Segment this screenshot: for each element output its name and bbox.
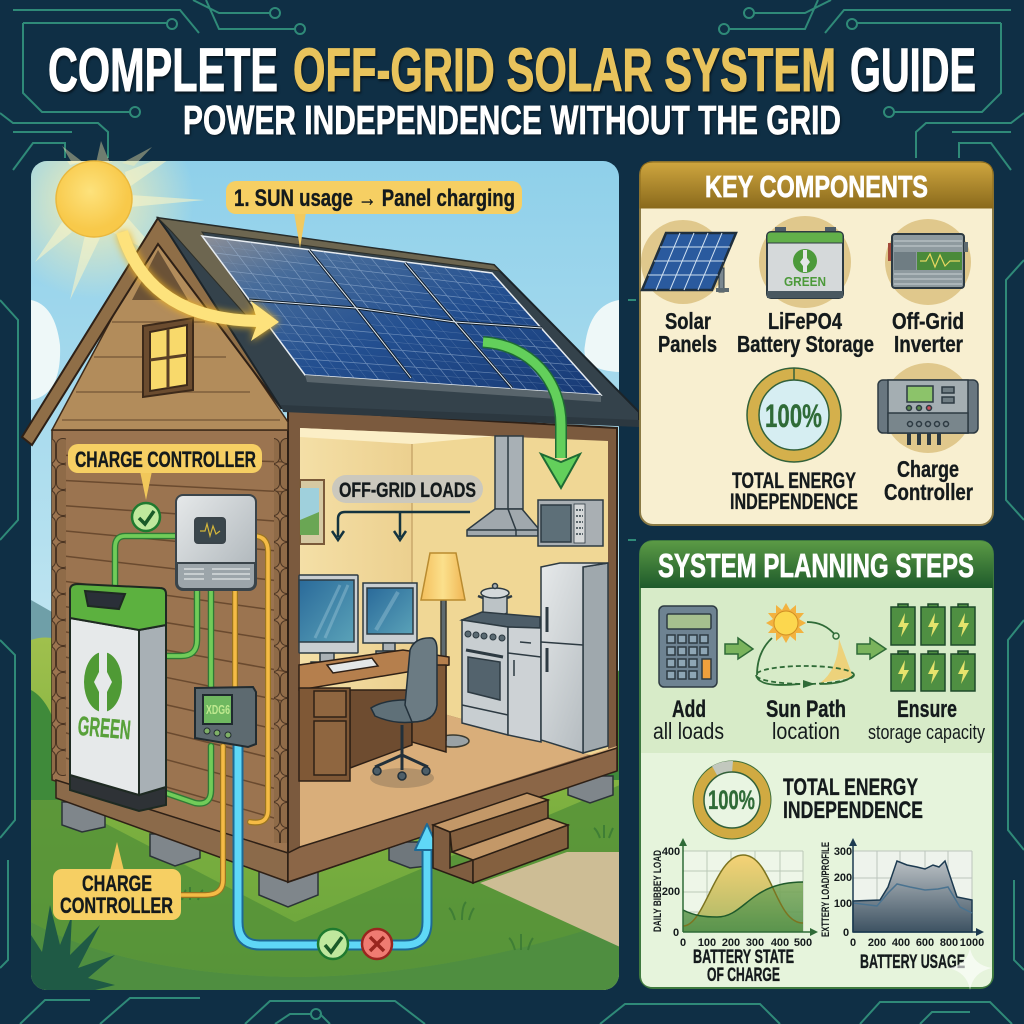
icon: sun path [756,603,854,688]
ring: 100 percent: 100% [708,785,755,815]
label: sun path location: location [772,718,840,744]
charge controller box [195,687,256,747]
label: charge controller: Controller [884,479,973,505]
arrow: panels to loads [483,342,580,488]
chart: battery usage: 200 [868,937,886,949]
label: total energy independence: TOTAL ENERGY [732,468,856,493]
green DC wires [115,536,211,803]
callout: charge controller top [68,444,262,500]
chart: battery state of charge: 100 [698,937,716,949]
sky and landscape [31,161,620,990]
chart: battery usage: 400 [892,937,910,949]
inverter box [176,495,256,590]
charge controller box: XDG6 [206,702,230,717]
chart: battery usage: 100 [834,898,852,910]
picture frame [300,480,324,544]
panel: system planning steps [640,541,993,988]
label: sun path location [766,696,846,744]
icon: battery bank [891,604,975,691]
roof [158,218,639,427]
label: add all loads: Add [672,696,706,723]
callout: charge controller bottom: CONTROLLER [60,893,173,918]
arrow step 1 to 2 [725,638,753,659]
chart: battery state of charge: 400 [662,846,680,858]
sun [31,141,204,300]
interior room [288,410,617,882]
off-grid loads label [332,475,483,540]
battery logo: GREEN [77,711,132,745]
computer monitors [299,575,417,665]
chart: battery usage: 0 [843,927,849,939]
cabinet [508,627,541,742]
heading: total energy independence [783,774,923,824]
icon: charge controller [878,363,978,453]
desk [299,650,449,781]
ring: 100 percent: 100% [765,398,822,434]
chart: battery usage: EXTTERY LOAD/PROFILE [820,842,832,937]
chart: battery state of charge: 200 [722,937,740,949]
chart: battery state of charge: 300 [746,937,764,949]
microwave [538,500,603,546]
chart: battery usage: 300 [834,846,852,858]
solar panel array [202,236,601,402]
chart: battery usage: 0 [850,937,856,949]
chart: battery state of charge: 200 [662,886,680,898]
label: solar panels: Solar [665,308,711,334]
panel: key components [640,162,993,525]
title: COMPLETE [48,36,278,104]
label: add all loads [653,696,724,744]
label: solar panels: Panels [658,331,717,357]
roof gable wall [22,218,292,445]
label: sun path location: Sun Path [766,696,846,723]
status check at inverter [132,503,160,531]
floor lamp [421,553,469,747]
label: add all loads: all loads [653,718,724,744]
refrigerator [541,563,608,753]
chart: battery state of charge: 500 [794,937,812,949]
log wall exterior [52,430,288,882]
title [48,36,976,104]
blue load wire [238,746,439,945]
chart: battery state of charge: 0 [673,927,679,939]
orange AC wires [178,536,268,895]
label: total energy independence: INDEPENDENCE [730,489,858,514]
header [640,162,993,208]
icon: off-grid inverter [885,219,971,305]
heading: total energy independence: TOTAL ENERGY [783,774,918,801]
panel: house cutaway scene [0,99,639,990]
stove with pot [462,584,540,735]
attic window [143,318,193,397]
off-grid loads label: OFF-GRID LOADS [339,479,476,502]
kitchen hood [467,436,538,536]
chart: battery state of charge: 0 [680,937,686,949]
chart: battery usage [820,838,984,973]
icon: LiFePO4 battery: GREEN [784,274,826,289]
battery logo [77,652,132,745]
chart: battery state of charge [652,838,818,986]
label: total energy independence [730,468,858,514]
chart: battery state of charge: 400 [771,937,789,949]
wiring [115,536,439,945]
label: solar panels [658,308,717,357]
label: inverter [892,308,964,357]
arrow step 2 to 3 [857,638,886,659]
label: inverter: Off-Grid [892,308,964,334]
callout: charge controller bottom: CHARGE [82,871,152,896]
label: battery storage [737,308,874,357]
chart: battery usage: 600 [916,937,934,949]
chart: battery state of charge: OF CHARGE [707,965,780,986]
label: ensure storage capacity: Ensure [897,696,957,723]
chart: battery state of charge: BATTERY STATE [693,947,794,968]
chart: battery usage: 200 [834,872,852,884]
ring: 100 percent [693,761,771,839]
chart: battery usage: 800 [940,937,958,949]
label: charge controller [884,456,973,505]
office chair [370,638,437,788]
label: ensure storage capacity: storage capacity [868,722,985,744]
watermark sparkle [948,948,992,990]
label: inverter: Inverter [894,331,963,357]
chart: battery usage: 1000 [960,937,984,949]
ring: 100 percent [747,368,841,462]
chart: battery state of charge: DAILY BIBBEY LOAD [652,850,664,932]
status check on load wire [318,929,348,959]
callout: charge controller top: CHARGE CONTROLLER [75,447,256,472]
icon: solar panel [641,220,736,304]
piers and foundation [62,776,613,907]
arrow: sunlight to panels [122,232,279,341]
callout: sun to panel: 1. SUN usage → Panel charging [234,185,515,212]
header [640,541,993,588]
chart: battery usage: BATTERY USAGE [860,952,965,973]
callout: charge controller bottom [53,842,181,920]
label: ensure storage capacity [868,696,985,744]
entry steps [433,793,568,883]
label: charge controller: Charge [897,456,959,482]
icon: LiFePO4 battery [759,216,851,308]
icon: calculator [659,606,717,687]
label: battery storage: Battery Storage [737,331,874,357]
callout: sun to panel [226,181,522,248]
header: KEY COMPONENTS [705,169,928,204]
green battery [70,584,166,811]
heading: total energy independence: INDEPENDENCE [783,797,923,824]
label: battery storage: LiFePO4 [768,308,842,334]
status cross on load wire [362,929,392,959]
